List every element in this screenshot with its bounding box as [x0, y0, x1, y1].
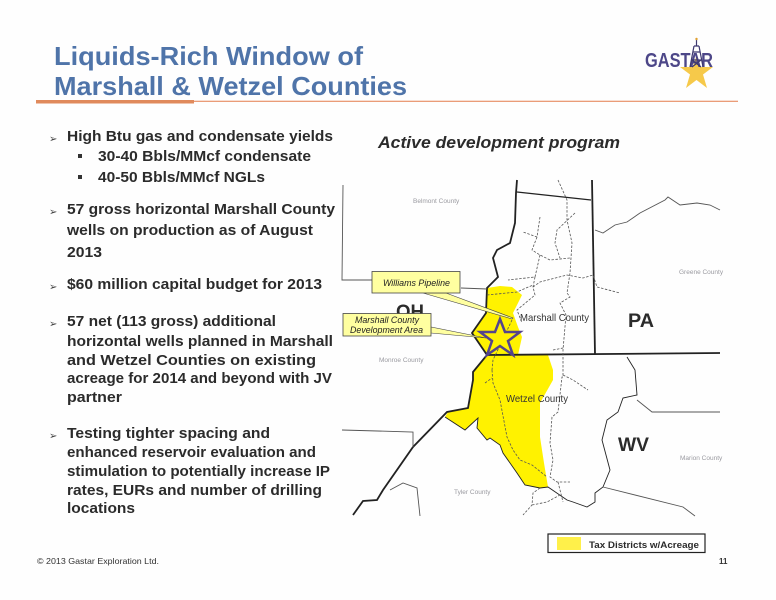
county labels: Tyler County [454, 489, 491, 496]
map [342, 180, 724, 516]
bullet: tighter spacing: enhanced reservoir evaluation and [67, 445, 316, 461]
state labels [396, 302, 654, 456]
bullet: High Btu: 40-50 Bbls/MMcf NGLs [98, 170, 265, 186]
bullet: net wells: acreage for 2014 and beyond with JV [67, 371, 332, 387]
bullet: tighter spacing: ➢ [49, 431, 57, 442]
bullet: net wells: and Wetzel Counties on existing [67, 353, 316, 369]
yellow acreage [445, 286, 553, 488]
county labels: Marion County [680, 455, 723, 462]
callout: Williams Pipeline [372, 272, 513, 319]
bullet: net wells: 57 net (113 gross) additional [67, 314, 276, 330]
bullet: capital budget: ➢ [49, 282, 57, 293]
title: Liquids-Rich Window of [54, 41, 363, 71]
county and state borders [342, 180, 720, 516]
bullet: net wells: horizontal wells planned in Marshall [67, 334, 333, 350]
county labels [379, 198, 724, 496]
bullet: gross wells: 57 gross horizontal Marshall County [67, 202, 335, 218]
map heading: Active development program [377, 134, 620, 152]
bullet: gross wells: wells on production as of August [66, 223, 313, 239]
bullet list [49, 129, 335, 517]
icon: Gastar logo [645, 38, 713, 88]
state labels: PA [628, 311, 654, 332]
bullet: High Btu: 30-40 Bbls/MMcf condensate [98, 149, 311, 165]
bullet: gross wells: ➢ [49, 207, 57, 218]
bullet: tighter spacing: Testing tighter spacing and [67, 426, 270, 442]
legend [548, 534, 705, 552]
title [54, 41, 407, 101]
copyright footer: © 2013 Gastar Exploration Ltd. [37, 556, 159, 566]
bullet: High Btu [49, 129, 333, 186]
county labels: Belmont County [413, 198, 460, 205]
bullet: gross wells [49, 202, 335, 261]
callout: Marshall County Development Area: Marshall County [355, 315, 420, 325]
bullet: tighter spacing: locations [67, 501, 135, 517]
legend: Tax Districts w/Acreage [589, 540, 699, 550]
bullet: tighter spacing [49, 426, 330, 517]
title: Marshall & Wetzel Counties [54, 71, 407, 101]
county labels: Marshall County [520, 312, 590, 324]
bullet: net wells [49, 314, 333, 406]
icon: development star [480, 319, 520, 355]
bullet: net wells: ➢ [49, 319, 57, 330]
bullet: gross wells: 2013 [67, 245, 102, 261]
county labels: Greene County [679, 269, 724, 276]
icon: Gastar logo: GASTAR [645, 50, 713, 72]
bullet: High Btu: High Btu gas and condensate yields [67, 129, 333, 145]
title rule [36, 100, 738, 104]
roads and pipelines [485, 180, 620, 515]
callout: Marshall County Development Area: Development Area [350, 325, 423, 335]
callout: Marshall County Development Area [343, 314, 486, 338]
county labels: Monroe County [379, 357, 424, 364]
bullet: net wells: partner [67, 390, 122, 406]
bullet: capital budget: $60 million capital budget for 2013 [67, 277, 322, 293]
state labels: OH [396, 302, 424, 323]
county labels: Wetzel County [506, 393, 569, 405]
page number: 11 [719, 557, 728, 566]
bullet: tighter spacing: rates, EURs and number of drilling [67, 483, 322, 499]
bullet: High Btu: ➢ [49, 134, 57, 145]
state labels: WV [618, 435, 649, 456]
callout: Williams Pipeline: Williams Pipeline [383, 278, 450, 288]
bullet: tighter spacing: stimulation to potentially increase IP [67, 464, 330, 480]
